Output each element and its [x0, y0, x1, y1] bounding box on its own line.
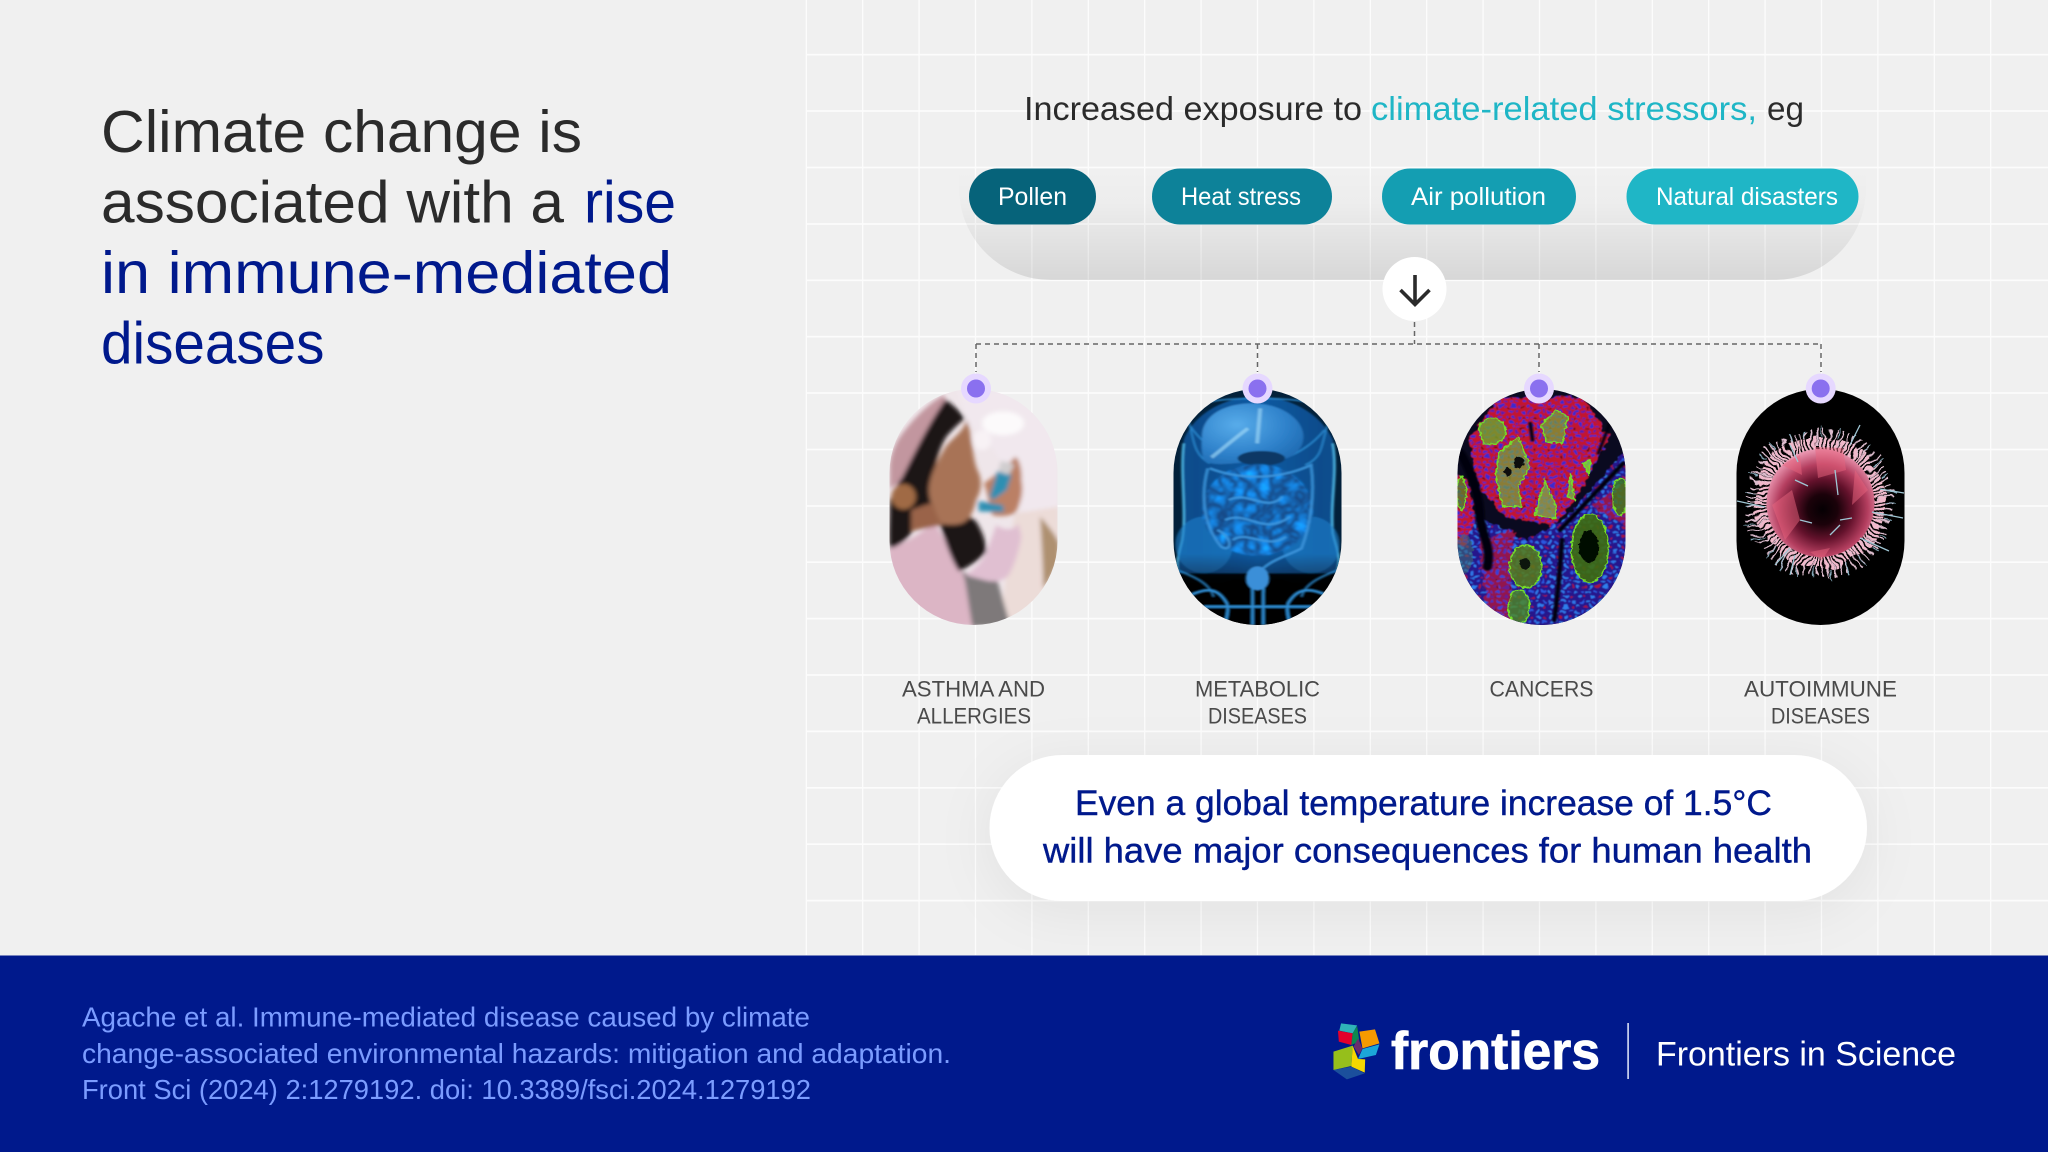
heading: climate-related stressors: eg: [1767, 90, 1804, 127]
disease labels: [902, 677, 1897, 728]
label: asthma and allergies: ASTHMA AND: [902, 677, 1045, 702]
label: metabolic diseases: METABOLIC: [1195, 677, 1320, 702]
journal name: Frontiers in Science: [1656, 1036, 1956, 1074]
label: metabolic diseases: [1195, 677, 1320, 728]
title: diseases: [101, 310, 324, 376]
pill: pollen: Pollen: [998, 183, 1067, 211]
pill: heat stress: [1152, 168, 1332, 224]
icon: down arrow in circle: [1382, 257, 1446, 321]
pill: pollen: [969, 168, 1096, 224]
background grid: [806, 0, 2048, 955]
label: cancers: CANCERS: [1490, 677, 1594, 702]
dot: asthma: [961, 374, 991, 404]
label: asthma and allergies: ALLERGIES: [917, 703, 1031, 728]
title: rise: [584, 170, 676, 236]
divider: [1627, 1023, 1629, 1079]
title: Climate change is: [101, 99, 582, 165]
pill: natural disasters: Natural disasters: [1656, 183, 1838, 211]
callout: 1.5°C warning: Even a global temperature increase of 1.5°C: [1075, 784, 1772, 823]
label: autoimmune diseases: DISEASES: [1771, 703, 1870, 728]
label: autoimmune diseases: AUTOIMMUNE: [1744, 677, 1897, 702]
dashed connector tree: [976, 322, 1821, 372]
callout: 1.5°C warning: will have major consequences for human health: [1042, 831, 1812, 870]
grey shelf behind stressor pills: [959, 168, 1866, 280]
label: autoimmune diseases: [1744, 677, 1897, 728]
title: associated with a: [101, 170, 564, 236]
dot: autoimmune: [1806, 374, 1836, 404]
dot: metabolic: [1242, 374, 1272, 404]
citation: [82, 1002, 951, 1105]
icon: frontiers cubes: [1333, 1023, 1379, 1079]
pill: heat stress: Heat stress: [1181, 183, 1301, 211]
photo: autoimmune cell on black: [1736, 389, 1904, 625]
title: [101, 99, 676, 376]
title: in immune-mediated: [101, 240, 672, 306]
pill: air pollution: [1382, 168, 1576, 224]
citation: Agache et al. Immune-mediated disease caused by climate: [82, 1002, 810, 1033]
photo: cancer tissue micrograph: [1458, 390, 1626, 625]
dot: cancers: [1524, 374, 1554, 404]
citation: Front Sci (2024) 2:1279192. doi: 10.3389/fsci.2024.1279192: [82, 1074, 811, 1105]
callout: 1.5°C warning: [990, 755, 1867, 901]
heading: climate-related stressors: Increased exposure to: [1024, 90, 1362, 127]
photo: child using inhaler: [888, 388, 1059, 627]
stressor pills: [969, 168, 1858, 224]
logo: frontiers: frontiers: [1391, 1022, 1600, 1081]
heading: climate-related stressors: climate-related stressors,: [1371, 90, 1757, 127]
citation: change-associated environmental hazards: mitigation and adaptation.: [82, 1038, 951, 1069]
label: metabolic diseases: DISEASES: [1208, 703, 1307, 728]
connector dots on capsules: [961, 374, 1836, 404]
pill: natural disasters: [1626, 168, 1858, 224]
heading: climate-related stressors: [1024, 90, 1804, 127]
footer band: [0, 956, 2048, 1152]
label: asthma and allergies: [902, 677, 1045, 728]
photo: x-ray of abdomen: [1171, 388, 1344, 627]
pill: air pollution: Air pollution: [1411, 183, 1546, 211]
